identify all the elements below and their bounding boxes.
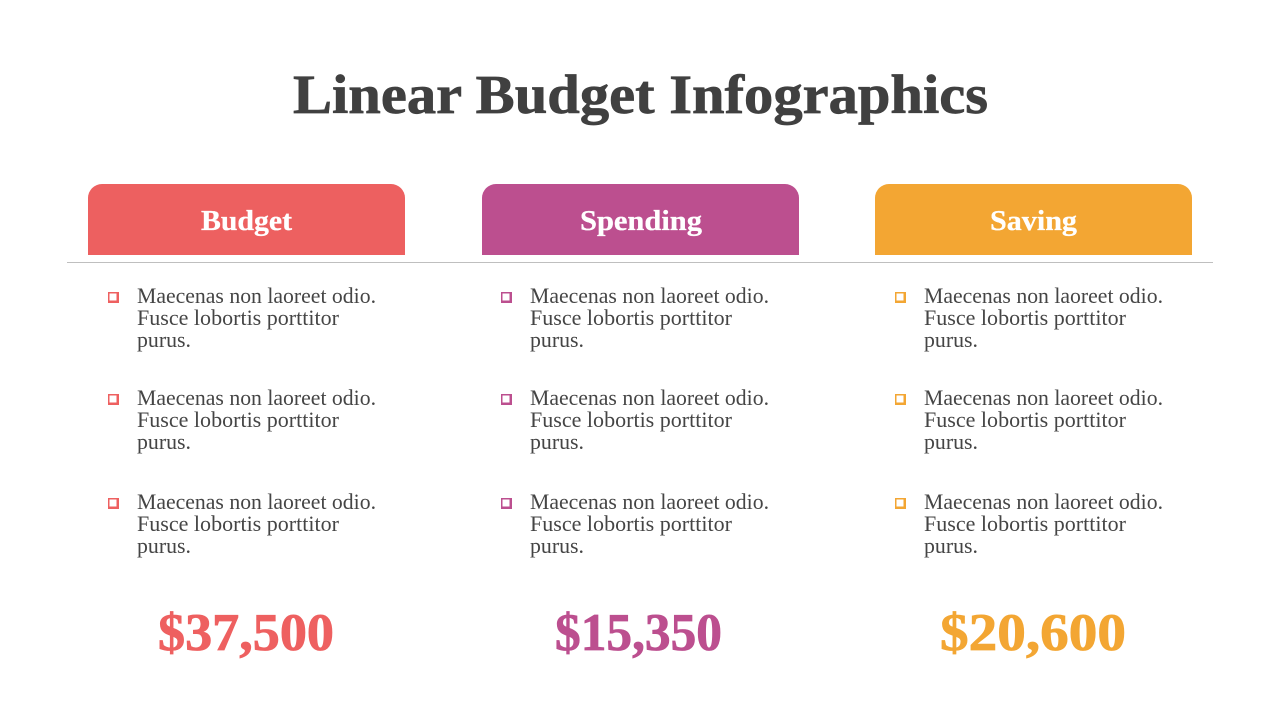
bullet item: budget 2: purus.: [137, 429, 191, 454]
bullet item: budget 2: Maecenas non laoreet odio.: [137, 385, 376, 410]
bullet item: saving 1: [895, 283, 1163, 352]
panel: spending: [482, 184, 799, 662]
header: saving: [875, 184, 1192, 255]
bullet item: budget 2: [108, 385, 376, 454]
bullet item: spending 2: [501, 385, 769, 454]
header: budget: [88, 184, 405, 255]
bullet item: saving 2: purus.: [924, 429, 978, 454]
bullet item: saving 3: Maecenas non laoreet odio.: [924, 489, 1163, 514]
bullet item: spending 2: purus.: [530, 429, 584, 454]
header: budget: Budget: [201, 205, 292, 237]
bullet item: saving 2: Maecenas non laoreet odio.: [924, 385, 1163, 410]
bullet item: saving 3: Fusce lobortis porttitor: [924, 511, 1127, 536]
bullet item: budget 3: [108, 489, 376, 558]
bullet item: saving 1: Maecenas non laoreet odio.: [924, 283, 1163, 308]
bullet item: budget 1: Fusce lobortis porttitor: [137, 305, 340, 330]
bullet item: saving 3: [895, 489, 1163, 558]
bullet item: saving 1: Fusce lobortis porttitor: [924, 305, 1127, 330]
bullet item: spending 3: purus.: [530, 533, 584, 558]
bullet item: spending 2: Fusce lobortis porttitor: [530, 407, 733, 432]
header: spending: [482, 184, 799, 255]
bullet item: saving 2: Fusce lobortis porttitor: [924, 407, 1127, 432]
amount: budget: $37,500: [158, 604, 334, 662]
bullet item: saving 2: [895, 385, 1163, 454]
panel: budget: [88, 184, 405, 662]
bullet item: spending 1: Maecenas non laoreet odio.: [530, 283, 769, 308]
bullet item: spending 3: Maecenas non laoreet odio.: [530, 489, 769, 514]
panel: saving: [875, 184, 1192, 662]
bullet item: budget 2: Fusce lobortis porttitor: [137, 407, 340, 432]
bullet item: saving 1: purus.: [924, 327, 978, 352]
bullet item: budget 3: Maecenas non laoreet odio.: [137, 489, 376, 514]
bullet item: budget 3: Fusce lobortis porttitor: [137, 511, 340, 536]
bullet item: spending 3: Fusce lobortis porttitor: [530, 511, 733, 536]
bullet item: budget 1: purus.: [137, 327, 191, 352]
amount: saving: $20,600: [940, 604, 1126, 662]
bullet item: budget 1: Maecenas non laoreet odio.: [137, 283, 376, 308]
bullet item: budget 3: purus.: [137, 533, 191, 558]
bullet item: spending 2: Maecenas non laoreet odio.: [530, 385, 769, 410]
title: Linear Budget Infographics: [293, 64, 988, 125]
bullet item: spending 1: Fusce lobortis porttitor: [530, 305, 733, 330]
bullet item: spending 1: purus.: [530, 327, 584, 352]
header: spending: Spending: [580, 205, 703, 237]
amount: spending: $15,350: [555, 604, 722, 662]
bullet item: budget 1: [108, 283, 376, 352]
bullet item: spending 1: [501, 283, 769, 352]
bullet item: saving 3: purus.: [924, 533, 978, 558]
bullet item: spending 3: [501, 489, 769, 558]
header: saving: Saving: [990, 205, 1078, 237]
